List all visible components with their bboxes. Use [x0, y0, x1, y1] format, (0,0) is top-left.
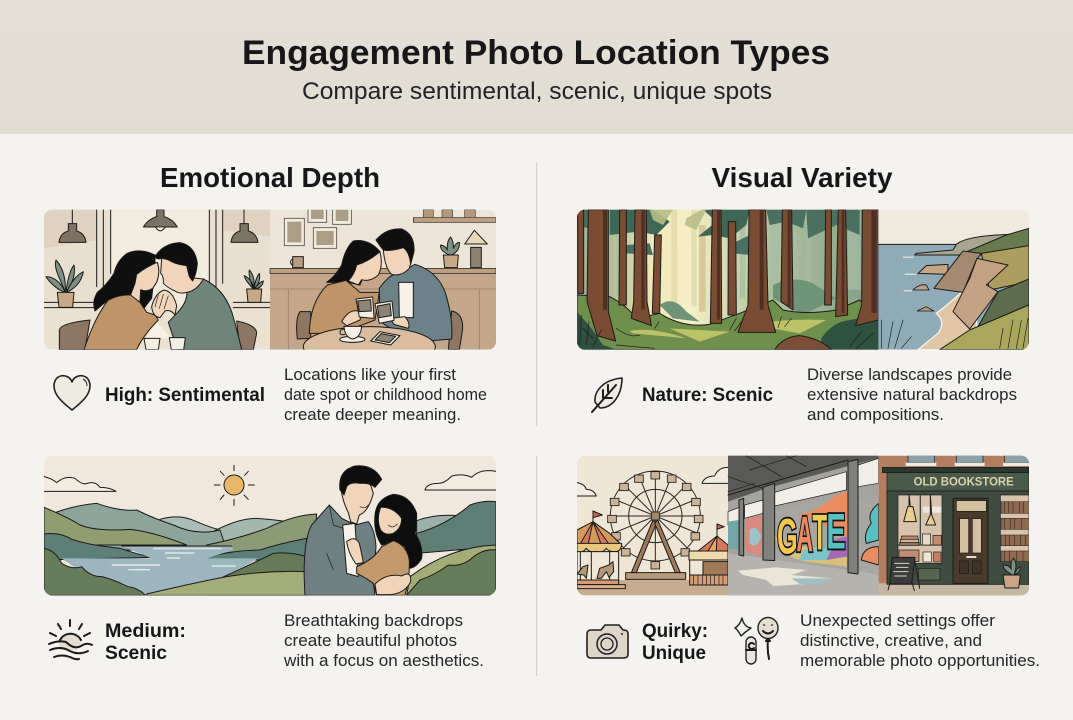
shelf: [413, 218, 496, 222]
frames: [284, 208, 351, 248]
graffiti hall: [728, 456, 879, 595]
description: scenic: create beautiful photos: [284, 632, 457, 650]
description: quirky: memorable photo opportunities.: [800, 652, 1040, 670]
icon: sun over waves: [49, 620, 92, 659]
graffiti lettering: A: [796, 507, 813, 563]
woman: [94, 251, 155, 313]
illustration: couple in cafe: [44, 210, 496, 350]
description: nature: Diverse landscapes provide: [807, 366, 1012, 384]
graffiti lettering: G: [777, 508, 798, 564]
description: scenic: with a focus on aesthetics.: [283, 652, 484, 670]
graffiti lettering: E: [826, 503, 846, 559]
ferris wheel: [610, 471, 700, 561]
description: quirky: [800, 612, 1040, 670]
description: scenic: Breathtaking backdrops: [284, 612, 463, 630]
chalkboard: [888, 557, 920, 591]
coast: [878, 210, 1029, 244]
cups: [144, 338, 185, 350]
trunks: [578, 210, 878, 341]
ground: [577, 295, 878, 350]
panel: Medium Scenic: [49, 612, 484, 670]
sun: [214, 465, 254, 505]
label: Medium Scenic: Medium:: [105, 621, 186, 642]
panel: High Sentimental: [54, 366, 487, 424]
right half wall: [270, 210, 496, 268]
panel: Quirky Unique: [587, 612, 1040, 670]
label: Nature Scenic: Nature: Scenic: [642, 385, 773, 406]
plants: [46, 260, 263, 307]
description: sentimental: [284, 366, 487, 424]
subtitle: Compare sentimental, scenic, unique spots: [302, 78, 772, 105]
hills: [44, 501, 496, 560]
tent: [689, 524, 728, 585]
man: [168, 279, 242, 350]
potted plant: [1003, 558, 1020, 588]
chairs: [59, 320, 257, 350]
description: nature: [807, 366, 1017, 424]
description: nature: extensive natural backdrops: [807, 386, 1017, 404]
shop sign: OLD BOOKSTORE: [914, 476, 1014, 489]
couple with photos: [297, 311, 463, 350]
couple: [304, 466, 422, 595]
heading: Emotional Depth: Emotional Depth: [160, 162, 380, 193]
icon: camera: [587, 625, 628, 658]
description: nature: and compositions.: [807, 406, 944, 424]
icon: heart: [54, 376, 90, 410]
graffiti lettering: [777, 512, 846, 556]
carousel: [577, 511, 625, 589]
description: scenic: [283, 612, 484, 670]
description: sentimental: Locations like your first: [284, 366, 456, 384]
illustration: carnival, graffiti, bookstore: [577, 453, 1030, 595]
description: quirky: Unexpected settings offer: [800, 612, 996, 630]
background trees: [671, 210, 706, 312]
panel: Nature Scenic: [592, 366, 1017, 424]
title: Engagement Photo Location Types: [242, 34, 830, 72]
heading: Visual Variety: Visual Variety: [712, 162, 893, 193]
header band: [0, 0, 1073, 134]
label: Medium Scenic: [105, 621, 186, 664]
label: Medium Scenic: Scenic: [105, 643, 167, 664]
illustration: forest and coast: [577, 210, 1029, 350]
illustration: couple at scenic lake: [44, 456, 496, 595]
description: sentimental: create deeper meaning.: [284, 406, 461, 424]
description: sentimental: date spot or childhood home: [284, 386, 487, 404]
description: quirky: distinctive, creative, and: [800, 632, 982, 650]
label: Quirky Unique: [642, 621, 708, 664]
bookstore: [879, 456, 1029, 595]
icon: sparkle, balloon and pill: [735, 618, 778, 664]
lamps: [59, 210, 258, 242]
label: Quirky Unique: Quirky:: [642, 621, 708, 642]
graffiti lettering: T: [812, 504, 827, 560]
icon: leaf: [592, 378, 622, 412]
label: Quirky Unique: Unique: [642, 643, 706, 664]
label: High Sentimental: High: Sentimental: [105, 385, 265, 406]
